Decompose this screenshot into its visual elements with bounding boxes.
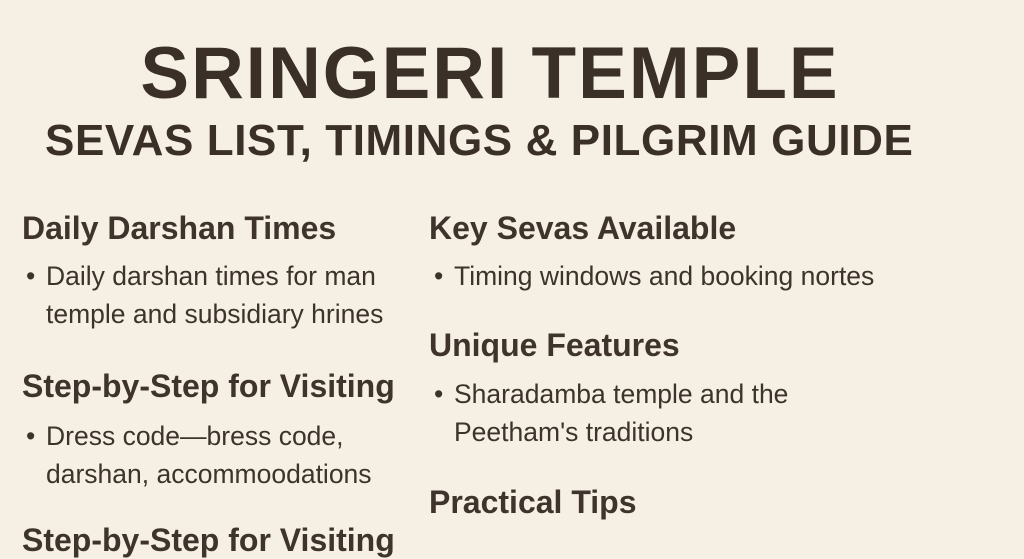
text: daily darshan: Daily darshan times for man: [46, 261, 376, 291]
text: step by step: Dress code—bress code,: [46, 421, 344, 451]
text: key sevas: •: [434, 261, 443, 291]
text: unique features: Peetham's traditions: [454, 417, 693, 447]
text: unique features: •: [434, 379, 443, 409]
subtitle: SEVAS LIST, TIMINGS & PILGRIM GUIDE: [45, 116, 913, 165]
heading: step by step cut off: Step-by-Step for Visiting: [22, 522, 395, 558]
text: key sevas: Timing windows and booking nortes: [454, 261, 874, 291]
text: daily darshan: temple and subsidiary hrines: [46, 299, 383, 329]
text: unique features: [434, 379, 788, 447]
heading: unique features: Unique Features: [429, 327, 680, 363]
text: unique features: Sharadamba temple and the: [454, 379, 788, 409]
title: SRINGERI TEMPLE: [140, 33, 840, 114]
text: step by step: •: [26, 421, 35, 451]
text: daily darshan: •: [26, 261, 35, 291]
heading: daily darshan: Daily Darshan Times: [22, 210, 336, 246]
text: step by step: [26, 421, 372, 489]
heading: step by step: Step-by-Step for Visiting: [22, 368, 395, 404]
text: step by step: darshan, accommoodations: [46, 459, 372, 489]
heading: key sevas: Key Sevas Available: [429, 210, 736, 246]
heading: practical tips: Practical Tips: [429, 484, 637, 520]
text: daily darshan: [26, 261, 383, 329]
